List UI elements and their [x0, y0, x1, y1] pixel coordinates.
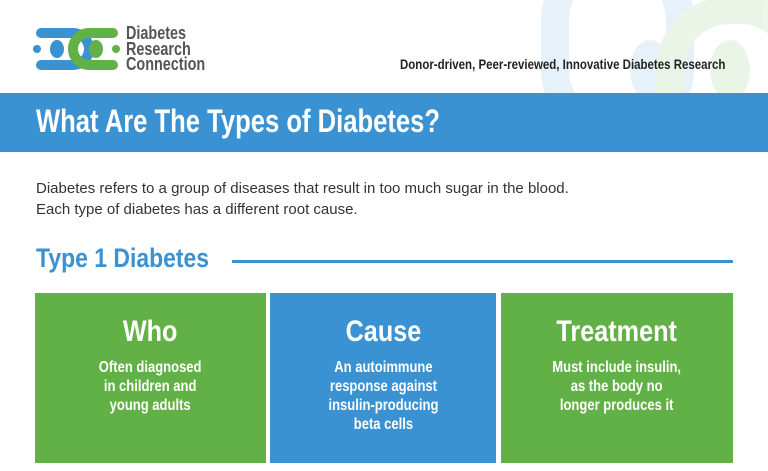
title banner: What Are The Types of Diabetes? [36, 103, 440, 139]
card: who: in children and [104, 378, 197, 395]
card: cause: response against [329, 378, 437, 395]
intro text: Diabetes refers to a group of diseases that result in too much sugar in the blood. [36, 180, 569, 197]
tagline: Donor-driven, Peer-reviewed, Innovative Diabetes Research [400, 56, 725, 72]
card: treatment: Must include insulin, [553, 359, 681, 376]
background decoration [541, 0, 768, 93]
card: treatment [501, 293, 733, 463]
card: cause: beta cells [353, 416, 413, 433]
card: who: young adults [110, 397, 191, 414]
card: treatment: as the body no [571, 378, 663, 395]
icon: logo mark [33, 28, 120, 70]
card: who [35, 293, 266, 463]
logo text [126, 23, 205, 74]
logo text: Connection [126, 54, 205, 74]
card: cause [270, 293, 496, 463]
card: who: Who [123, 315, 178, 348]
intro text: Each type of diabetes has a different root cause. [36, 201, 358, 218]
section heading: Type 1 Diabetes [36, 243, 209, 273]
title banner [0, 93, 768, 152]
card: who: Often diagnosed [99, 359, 202, 376]
card: treatment: longer produces it [560, 397, 674, 414]
logo text: Diabetes [126, 23, 186, 43]
card: cause: insulin-producing [328, 397, 438, 414]
card: cause: An autoimmune [334, 359, 432, 376]
intro text [36, 180, 569, 218]
logo [33, 23, 205, 74]
card: cause: Cause [345, 315, 421, 348]
logo text: Research [126, 38, 191, 58]
card: treatment: Treatment [557, 315, 677, 348]
